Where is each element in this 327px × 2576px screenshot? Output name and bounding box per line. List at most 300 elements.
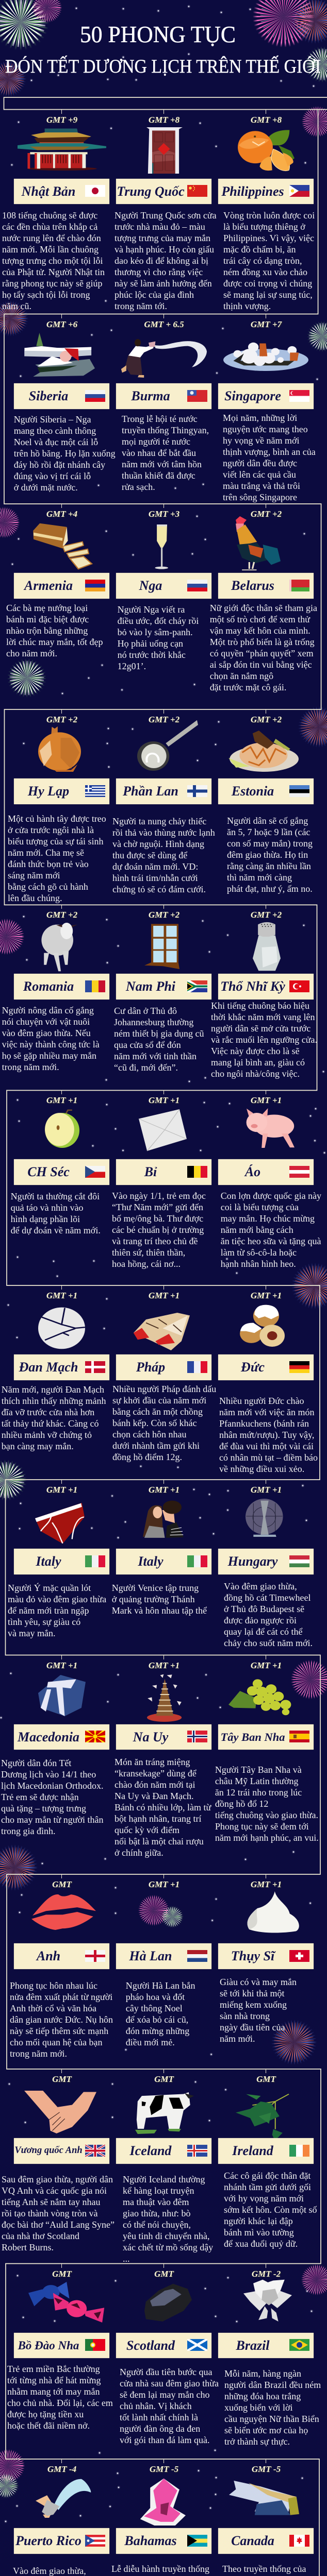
text block: Phong tục này sẽ đem tới xyxy=(215,1821,309,1832)
banner xyxy=(218,1724,314,1750)
text block: Người dân đón Tết xyxy=(1,1758,71,1768)
icon: mistletoe xyxy=(236,2092,290,2141)
text block: Giàu có và may mắn xyxy=(220,1977,297,1987)
text block: 108 tiếng chuông sẽ được xyxy=(2,210,97,221)
text block: Người Hà Lan bắn xyxy=(126,1980,195,1991)
text block: pháo hoa và đốt xyxy=(126,1992,185,2002)
GMT label: GMT +1 xyxy=(149,1879,179,1889)
GMT label: GMT xyxy=(256,2074,276,2084)
text block: nước rung lên để chào đón xyxy=(2,233,101,243)
text block: người dân Brazil đều ném xyxy=(224,2380,321,2390)
text block: được họ tặng tiền xu xyxy=(7,2409,84,2419)
flag: Scotland xyxy=(187,2339,207,2351)
country name: Singapore xyxy=(224,388,281,403)
GMT label: GMT +1 xyxy=(149,1291,179,1300)
text block xyxy=(1,1757,103,1837)
text block: tiếng chuông vào giao thừa. xyxy=(215,1810,318,1820)
panel: Nga xyxy=(110,504,216,709)
banner xyxy=(14,1724,109,1750)
text block: đồng hồ cát Timewheel xyxy=(224,1592,310,1603)
GMT label: GMT xyxy=(52,1879,72,1889)
panel: Pháp xyxy=(110,1285,216,1480)
text block: để dự đoán về năm mới. xyxy=(11,1225,101,1235)
text block: những đóa hoa trắng xyxy=(224,2391,301,2401)
text block: đĩa vỡ trước cửa nhà hơn xyxy=(2,1407,94,1417)
text block: bánh mì đặc biệt được xyxy=(6,614,89,624)
text block xyxy=(2,210,105,311)
text block: vào nhau để bắt đầu xyxy=(122,447,196,457)
text block: họ tẩy sạch tội lỗi trong xyxy=(2,290,90,300)
icon: kransekage tower cake xyxy=(147,1674,182,1722)
icon: red underwear xyxy=(35,1503,85,1544)
text block xyxy=(223,413,316,502)
text block: Phong tục hôn nhau lúc xyxy=(10,1980,97,1991)
panel: Armenia xyxy=(0,504,110,709)
text block: và hạnh phúc. Họ còn giấu xyxy=(115,244,214,255)
text block: Các cô gái độc thân đặt xyxy=(224,2170,310,2180)
text block: nhào trộn bằng những xyxy=(6,625,88,636)
text block: màu đỏ vào đêm giao thừa xyxy=(8,1594,106,1604)
text block: nói chuyện với vật nuôi xyxy=(2,1016,90,1027)
text block: bố mẹ/ông bà. Thư được xyxy=(112,1213,203,1224)
flag: Denmark xyxy=(85,1361,105,1372)
banner xyxy=(14,1159,109,1185)
text block: thịnh vượng. xyxy=(223,301,271,311)
icon: wishing spheres on boat xyxy=(223,342,308,371)
text block: ăn 12 trái nho trong lúc xyxy=(215,1787,302,1798)
text block: sàn nhà trong xyxy=(220,2011,270,2021)
text block: người đàn ông da đen xyxy=(120,2424,200,2434)
text block: phát đạt, như ý, ấm no. xyxy=(227,884,313,894)
GMT label: GMT +1 xyxy=(149,1660,179,1670)
country name: Belarus xyxy=(231,578,274,593)
icon: Timewheel hourglass xyxy=(246,1499,283,1537)
text block: nhiều mảnh vỡ chứng tỏ xyxy=(2,1430,92,1440)
banner xyxy=(116,178,211,204)
banner xyxy=(116,2528,211,2553)
GMT label: GMT +1 xyxy=(251,1660,282,1670)
icon: coal xyxy=(144,2283,192,2321)
text block xyxy=(112,1582,207,1616)
text block: hạnh nhân hình heo. xyxy=(221,1259,296,1269)
text block: bằng cách gõ củ hành xyxy=(8,882,88,892)
text block: và chờ nguội. Hình dạng xyxy=(112,839,204,849)
country name: Vương quốc Anh xyxy=(14,2145,83,2156)
icon: orange xyxy=(238,130,295,171)
country name: Puerto Rico xyxy=(15,2533,81,2548)
country name: Canada xyxy=(231,2533,274,2548)
text block: ... xyxy=(123,2253,130,2264)
flag: Netherlands xyxy=(187,1950,207,1962)
flag: Bahamas xyxy=(187,2535,207,2546)
text block: bánh kếp. Còn số khác xyxy=(112,1418,197,1428)
icon: water thrown from bucket xyxy=(36,2479,92,2518)
banner xyxy=(14,778,109,804)
banner xyxy=(218,1549,314,1574)
GMT label: GMT +1 xyxy=(149,1095,179,1105)
country name: Nhật Bản xyxy=(22,183,75,199)
GMT label: GMT + 6.5 xyxy=(144,319,184,329)
text block: sự khởi đầu của năm mới xyxy=(112,1395,206,1405)
icon: white flower xyxy=(243,2279,292,2321)
text block: Johannesburg thường xyxy=(114,1017,193,1027)
panel: Nhật Bản xyxy=(0,109,110,314)
text block: cho chủ nhà. Đổi lại, các em xyxy=(7,2398,113,2408)
text block: vào đêm giao thừa. Nếu xyxy=(2,1028,91,1038)
panel: Thổ Nhĩ Kỳ xyxy=(216,905,327,1090)
text block: màu trắng và thả trôi xyxy=(223,481,300,491)
text block xyxy=(10,1980,113,2059)
flag: Germany xyxy=(289,1361,309,1372)
text block: sẽ tới khi thả một xyxy=(220,1988,285,1998)
GMT label: GMT +6 xyxy=(46,319,77,329)
text block xyxy=(6,603,103,658)
panel: Scotland xyxy=(110,2264,216,2459)
icon: crepes xyxy=(133,1313,190,1350)
text block: con số may mắn) trong xyxy=(227,838,313,849)
text block: ma thuật vào đêm xyxy=(123,2197,189,2207)
banner xyxy=(218,1943,314,1969)
GMT label: GMT +8 xyxy=(149,114,179,125)
banner xyxy=(218,178,314,204)
text block: mang lại bình an, giàu có xyxy=(211,1057,305,1067)
text block: đặt trước mặt cô gái. xyxy=(210,682,286,692)
panel: Italy (Venice) xyxy=(110,1480,216,1655)
text block: bánh mì vào tường xyxy=(224,2227,294,2237)
text block: ném thiết bị gia dụng cũ xyxy=(114,1028,204,1039)
country name: Iceland xyxy=(130,2143,171,2158)
text block: cho mối quan hệ của bạn xyxy=(10,2037,102,2047)
text block: lịch Macedonian Orthodox. xyxy=(1,1781,103,1791)
text block: tất thảy thứ khác. Càng có xyxy=(2,1418,99,1429)
text block: viết lên các quả cầu xyxy=(223,469,296,480)
flag: Russia xyxy=(187,580,207,591)
text block: Vào đêm giao thừa, xyxy=(13,2566,86,2576)
flag: Czech Republic xyxy=(85,1166,105,1178)
country name: Phần Lan xyxy=(123,784,178,799)
country name: Romania xyxy=(23,979,74,994)
text block xyxy=(220,1976,297,2044)
text block: nhằm mang tới may mắn xyxy=(7,2386,100,2397)
text block: năm mới với tâm hồn xyxy=(122,459,202,469)
text block: điều mới mẻ. xyxy=(126,2037,175,2047)
text block: thuần khiết đã được xyxy=(122,470,195,480)
text block: Vào ngày 1/1, trẻ em đọc xyxy=(112,1191,206,1201)
icon: holding hands xyxy=(24,2091,96,2133)
banner xyxy=(218,1159,314,1185)
text block: mang theo cành thông xyxy=(14,426,96,436)
GMT label: GMT -5 xyxy=(150,2464,178,2474)
text block: cho năm mới. xyxy=(6,648,57,658)
country name: Pháp xyxy=(136,1360,165,1375)
GMT label: GMT +2 xyxy=(149,910,179,920)
panel: Italy xyxy=(0,1480,110,1655)
text block: ở quảng trường Thánh xyxy=(112,1594,195,1604)
country name: Philippines xyxy=(221,183,284,199)
text block: Họ phải uống cạn xyxy=(118,638,183,649)
GMT label: GMT +3 xyxy=(149,509,179,519)
text block: Một trò phổ biến là gà trống xyxy=(210,637,315,647)
flag: Ireland xyxy=(289,2144,309,2157)
text block: Robert Burns. xyxy=(2,2242,54,2252)
banner xyxy=(14,178,109,204)
text block: làm từ sô-cô-la hoặc xyxy=(221,1247,297,1258)
flag: Belarus xyxy=(289,580,309,591)
country name: Macedonia xyxy=(18,1729,79,1744)
country name: Estonia xyxy=(232,784,274,799)
banner xyxy=(14,1943,109,1969)
text block: chào đón năm mới tại xyxy=(115,1780,195,1790)
icon: salt shaker xyxy=(253,922,281,971)
icon: broken plate xyxy=(38,1308,85,1349)
panel: Bồ Đào Nha xyxy=(0,2264,110,2459)
text block: rồi tạo thành vòng tròn và xyxy=(2,2208,97,2218)
row 2 xyxy=(13,314,316,502)
banner xyxy=(14,383,109,409)
panel: CH Séc xyxy=(0,1090,110,1285)
icon: halved apple xyxy=(45,1109,79,1148)
row 7 xyxy=(0,1285,327,1480)
text block: năm mới. xyxy=(220,2033,255,2044)
text block xyxy=(114,1005,204,1073)
text block: hình dạng phần lõi xyxy=(11,1214,80,1224)
country name: Bỉ xyxy=(144,1164,157,1179)
icon: whipped cream xyxy=(247,1891,300,1933)
flag: England xyxy=(85,1950,105,1962)
text block: quả táo và nhìn vào xyxy=(11,1202,84,1213)
text block: kể hàng loạt truyện xyxy=(123,2185,194,2196)
text block: ở cửa trước ngôi nhà là xyxy=(8,825,94,835)
panel: Brazil xyxy=(216,2264,327,2459)
flag: China xyxy=(187,185,207,197)
GMT label: GMT +2 xyxy=(251,715,282,724)
text block: châu Mỹ Latin thường xyxy=(215,1776,299,1786)
flag: Romania xyxy=(85,980,105,992)
text block: thương vì cho rằng việc xyxy=(115,267,203,277)
text block: qua cửa sổ để đón xyxy=(114,1040,181,1050)
icon: lips xyxy=(31,1894,96,1930)
text block xyxy=(224,1581,313,1649)
text block xyxy=(112,1190,206,1269)
panel: Macedonia xyxy=(0,1655,110,1874)
flag: Greece xyxy=(85,785,105,797)
row 5 xyxy=(0,905,327,1090)
text block: xác chết từ mồ sống dậy xyxy=(123,2242,213,2252)
text block: Theo truyền thống của xyxy=(222,2564,306,2574)
panel: Na Uy xyxy=(110,1655,216,1874)
text block: với hy vọng năm mới xyxy=(224,2193,304,2203)
banner xyxy=(218,573,314,599)
panel: Burma xyxy=(110,314,216,504)
text block: nguyện ước mang theo xyxy=(223,424,308,434)
icon: person splashing water xyxy=(121,339,207,378)
text block: cho may mắn từ người thân xyxy=(1,1815,103,1825)
text block: Mọi năm, những lời xyxy=(223,413,297,423)
text block: tới từng nhà để hát mừng xyxy=(7,2375,101,2385)
country name: Nga xyxy=(139,578,162,593)
GMT label: GMT +7 xyxy=(251,319,282,329)
GMT label: GMT +1 xyxy=(251,1095,282,1105)
text block: Na Uy và Đan Mạch. xyxy=(115,1791,193,1801)
text block: năm cũ. xyxy=(2,301,31,311)
icon: dish xyxy=(228,731,299,772)
GMT label: GMT xyxy=(52,2269,72,2279)
text block xyxy=(122,413,209,492)
text block: trên hồ băng. Họ lặn xuống xyxy=(14,448,116,459)
flag: Puerto Rico xyxy=(85,2535,105,2546)
text block xyxy=(211,1000,317,1079)
text block: “cũ đi, mới đến”. xyxy=(114,1062,178,1073)
country name: Italy xyxy=(36,1554,61,1569)
text block: Dương lịch vào 14/1 theo xyxy=(1,1769,96,1780)
text block: cầu nguyện Nữ thần Biển xyxy=(224,2414,319,2424)
GMT label: GMT xyxy=(154,2074,174,2084)
text block: năm mới hạnh phúc, an vui. xyxy=(215,1833,319,1843)
text block: đêm giao thừa. Họ tin xyxy=(227,850,308,860)
banner xyxy=(116,2138,211,2164)
text block: hy vọng về năm mới xyxy=(223,435,299,446)
text block: tượng trưng cho một tội lỗi xyxy=(2,256,103,266)
banner xyxy=(14,2333,109,2358)
banner xyxy=(218,383,314,409)
country name: Burma xyxy=(131,388,170,403)
text block: ở chính giữa. xyxy=(115,1848,164,1858)
text block xyxy=(223,210,315,311)
country name: Trung Quốc xyxy=(117,183,185,199)
panel: Nam Phi xyxy=(110,905,216,1090)
text block: đúng vào vị trí cái lỗ xyxy=(14,471,91,481)
text block xyxy=(215,1764,319,1843)
icon: temple xyxy=(18,129,106,171)
text block xyxy=(118,604,199,671)
flag: United Kingdom xyxy=(85,2144,105,2157)
text block: đọc bài thơ “Auld Lang Syne” xyxy=(2,2219,115,2230)
flag: Belgium xyxy=(187,1166,207,1178)
text block xyxy=(8,814,106,903)
text block xyxy=(227,815,313,894)
text block: có nhân mù tạt – điềm báo xyxy=(219,1452,318,1463)
flag: Japan xyxy=(85,185,105,197)
banner xyxy=(218,1354,314,1380)
panel: Anh xyxy=(0,1874,110,2069)
country name: Scotland xyxy=(126,2338,175,2353)
banner xyxy=(116,1943,211,1969)
text block xyxy=(115,210,217,311)
text block: để xua đuổi quỷ dữ. xyxy=(224,2238,298,2248)
country name: Na Uy xyxy=(133,1729,168,1744)
text block: này sẽ làm ảnh hưởng đến xyxy=(115,278,212,289)
country name: Bahamas xyxy=(124,2533,177,2548)
text block: trong gia đình. xyxy=(1,1826,56,1836)
panel: Canada xyxy=(216,2459,327,2576)
text block: “Thư Năm mới” gửi đến xyxy=(112,1202,203,1212)
text block: các đền chùa trên khắp cả xyxy=(2,222,97,232)
text block: ném đồng xu vào chảo xyxy=(223,267,307,277)
text block: Mỗi năm, hàng ngàn xyxy=(224,2368,301,2379)
text block: Trong lễ hội té nước xyxy=(122,413,198,423)
text block: Người ta thường cắt đôi xyxy=(11,1191,100,1201)
banner xyxy=(116,1354,211,1380)
text block: Người Ý mặc quần lót xyxy=(8,1583,91,1593)
panel: Ireland xyxy=(216,2069,327,2264)
text block xyxy=(8,1582,106,1639)
text block xyxy=(2,1005,100,1073)
text block: trên sông Singapore xyxy=(223,492,297,502)
banner xyxy=(14,1354,109,1380)
text block: nó trước thời khắc xyxy=(118,650,186,660)
text block xyxy=(120,2366,219,2446)
country name: Hungary xyxy=(228,1554,277,1569)
banner xyxy=(14,2138,109,2164)
row 1 xyxy=(2,110,315,311)
icon: cow xyxy=(135,2092,194,2134)
text block: họ sẽ gặp nhiều may mắn xyxy=(2,1050,96,1061)
icon: pan with melted tin xyxy=(137,720,198,771)
row 13 xyxy=(0,2459,327,2576)
text block: thời khắc năm mới vang lên xyxy=(211,1012,315,1022)
text block xyxy=(11,1191,101,1236)
text block: Người dân sẽ cố gắng xyxy=(227,816,308,826)
text block xyxy=(2,1384,106,1452)
text block: Noel và đục một cái lỗ xyxy=(14,437,98,447)
panel: Romania xyxy=(0,905,110,1090)
country name: Armenia xyxy=(24,578,73,593)
row 10 xyxy=(0,1874,327,2069)
banner xyxy=(116,573,211,599)
country name: Italy xyxy=(138,1554,164,1569)
text block: Nữ giới độc thân sẽ tham gia xyxy=(210,603,317,613)
icon: doughnuts xyxy=(240,1304,285,1347)
text block: Philippines. Vì vậy, việc xyxy=(223,233,314,243)
text block: Lễ diễu hành truyền thống xyxy=(111,2564,209,2574)
panel: Đức xyxy=(216,1285,327,1480)
GMT label: GMT +4 xyxy=(46,509,77,519)
icon: letter xyxy=(139,1109,187,1151)
text block: sẽ biến ước mơ của họ xyxy=(224,2425,308,2435)
banner xyxy=(116,1724,211,1750)
text block: đánh thức bọn trẻ vào xyxy=(8,859,89,869)
text block: và may mắn. xyxy=(8,1628,55,1638)
text block: Trẻ em miền Bắc thường xyxy=(7,2364,100,2374)
text block: rằng càng ăn nhiều lần xyxy=(227,861,311,871)
panel: Đan Mạch xyxy=(0,1285,110,1480)
GMT label: GMT +1 xyxy=(251,1291,282,1300)
text block: Con lợn được quốc gia này xyxy=(221,1191,321,1201)
text block: trong năm mới. xyxy=(10,2048,67,2059)
text block: đáy hồ rồi đặt nhánh cây xyxy=(14,460,105,470)
panel: Belarus xyxy=(216,504,327,709)
icon: sheep xyxy=(41,923,77,972)
country name: Thụy Sĩ xyxy=(231,1948,274,1963)
panel: Hy Lạp xyxy=(0,709,110,905)
text block: hoặc thết đãi niềm nở. xyxy=(7,2420,90,2431)
text block: 12g01’. xyxy=(118,661,146,671)
text block: Người Venice tập trung xyxy=(112,1583,199,1593)
text block xyxy=(2,2174,115,2253)
icon: bread xyxy=(33,523,93,570)
country name: Brazil xyxy=(236,2338,270,2353)
icon: grapes xyxy=(228,1679,292,1716)
country name: Đan Mạch xyxy=(19,1360,78,1375)
text block: chứng tỏ sẽ có đám cưới. xyxy=(112,884,206,894)
text block: “kransekage” dùng để xyxy=(115,1768,197,1778)
banner xyxy=(116,383,211,409)
text block: chủ nhân. Vị khách xyxy=(120,2401,192,2411)
GMT label: GMT -4 xyxy=(47,2464,76,2474)
icon: window xyxy=(144,923,179,969)
text block: năm mới với tinh thần xyxy=(114,1051,197,1061)
text block: được đảo ngược rồi xyxy=(224,1615,297,1625)
